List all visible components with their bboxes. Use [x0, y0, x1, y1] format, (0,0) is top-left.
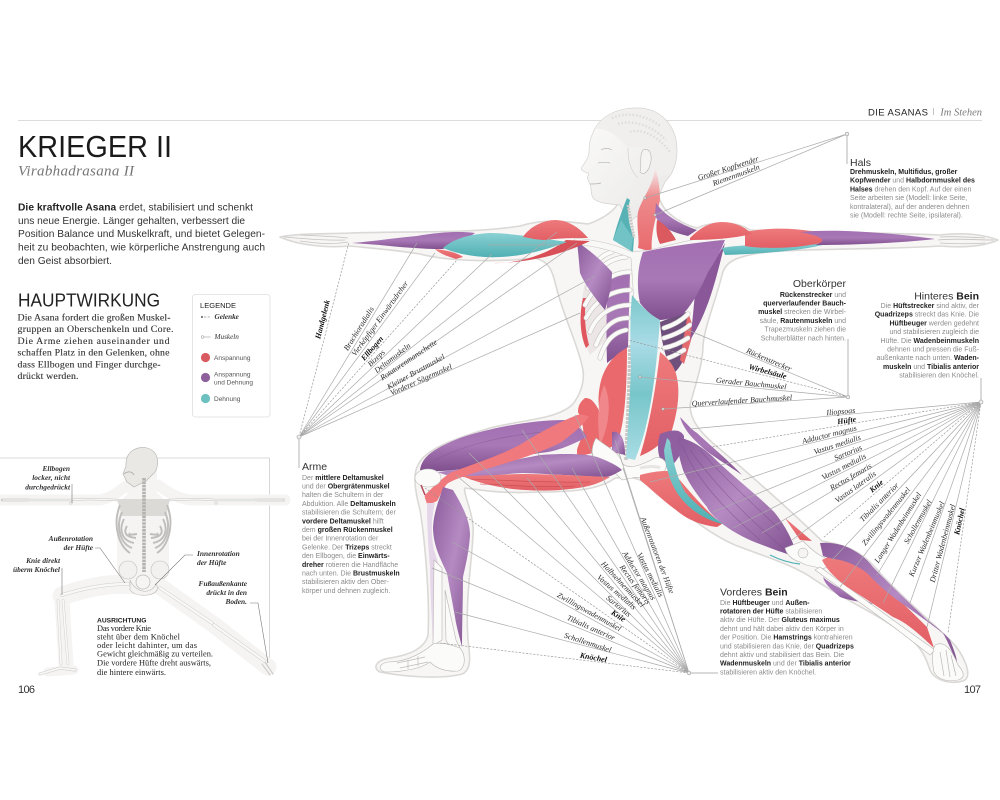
- text: Hauptwirkung: gruppen an Oberschenkeln und Core.: [18, 324, 174, 335]
- inset note: knee: überm Knöchel: [13, 565, 61, 574]
- figure: pelvis and hip bones: [592, 438, 666, 480]
- inset note: external rotation: [48, 534, 94, 552]
- text block: Vorderes Bein: dehnt und hält dabei aktiv den Körper in: [720, 626, 844, 633]
- text block: Oberkörper: [758, 278, 847, 342]
- text: Hauptwirkung: Die Asana fordert die großen Muskel-: [18, 312, 170, 324]
- label: Vorderer Sägemuskel: Vorderer Sägemuskel: [389, 362, 454, 397]
- label: Dritter Wadenbeinmuskel: Dritter Wadenbeinmuskel: [928, 502, 958, 584]
- text block: Hinteres Bein: und stabilisieren zugleich die: [890, 329, 979, 336]
- text: Hauptwirkung: drückt werden.: [18, 371, 78, 382]
- text: Hauptwirkung: [18, 312, 174, 382]
- text block: Vorderes Bein: der Position. Die Hamstrings kontrahieren: [720, 635, 853, 642]
- leaders: upper body: [628, 330, 850, 410]
- inset: skull: [123, 447, 158, 487]
- label: Sartorius: Sartorius: [604, 593, 633, 619]
- label: Schollenmuskel: Schollenmuskel: [563, 631, 613, 655]
- text block: Arme: dem großen Rückenmuskel: [302, 527, 393, 534]
- text block: Hals: Kopfwender und Halbdornmuskel des: [850, 178, 975, 185]
- inset note: external rotation: der Hüfte: [64, 543, 94, 552]
- text block: Hinteres Bein: [875, 290, 980, 380]
- figure: front knee: [415, 469, 441, 495]
- text block: Arme: den Ellbogen, die Einwärts-: [302, 553, 390, 560]
- label: Rückenstrecker: Rückenstrecker: [744, 346, 794, 374]
- label: Vastus medialis lower: Vastus medialis: [820, 452, 868, 482]
- text block: Hinteres Bein: Hüftbeuger werden gedehnt: [890, 320, 979, 327]
- text: Hauptwirkung: Die Arme ziehen auseinander und: [18, 336, 170, 347]
- alignment text: Die vordere Hüfte dreht auswärts,: [97, 658, 211, 668]
- text block: Vorderes Bein: Die Hüftbeuger und Außen-: [720, 600, 810, 607]
- page numbers: [18, 684, 981, 696]
- figure: left hand: [284, 235, 348, 244]
- figure: ribcage: [585, 252, 690, 460]
- main anatomical figure: [280, 108, 998, 682]
- figure: abdominal muscles: [577, 295, 678, 460]
- label: Adductor magnus: Adductor magnus: [620, 549, 658, 602]
- text block: Vorderes Bein: [720, 586, 854, 676]
- inset note: elbow: durchgedrückt: [25, 482, 71, 492]
- text block: Oberkörper: Trapezmuskeln ziehen die: [765, 327, 846, 334]
- text block: Hinteres Bein: Hinteres Bein: [914, 290, 979, 302]
- text block: Hinteres Bein: Quadrizeps streckt das Knie. Die: [875, 312, 979, 319]
- intro text: Position Balance und Muskelkraft, und bietet Gelegen-: [18, 229, 265, 240]
- inset note: outer foot edge: Boden.: [224, 597, 247, 606]
- label: Vastus medialis upper: Vastus medialis: [635, 551, 665, 599]
- alignment text: die hintere einwärts.: [97, 668, 166, 677]
- text: Hauptwirkung: dass Ellbogen und Finger durchge-: [18, 360, 160, 370]
- inset: leader lines: [62, 484, 268, 663]
- text block: Hals: kontralateral), auf der anderen dehnen: [850, 204, 970, 211]
- figure: right hand: [938, 237, 994, 244]
- inset: skeleton alignment figure: [0, 447, 285, 677]
- text block: Vorderes Bein: stabilisieren aktiv den Knöchel.: [720, 669, 816, 676]
- legend: tension and stretch: Anspannung: [214, 372, 251, 378]
- figure: deep hip muscles: [612, 430, 684, 468]
- figure: clavicle and sternum: [574, 236, 722, 302]
- inset note: elbow: locker, nicht: [32, 473, 71, 482]
- label: Sartorius: Sartorius: [833, 443, 863, 463]
- figure: back leg muscles: [640, 417, 812, 557]
- inset note: internal rotation: [196, 549, 240, 567]
- text block: Hinteres Bein: stabilisieren den Knöchel.: [899, 373, 979, 380]
- title: KRIEGER II: [18, 129, 172, 164]
- label: Kurzer Wadenbeinmuskel: Kurzer Wadenbeinmuskel: [906, 499, 947, 579]
- inset note: internal rotation: der Hüfte: [197, 558, 227, 567]
- inset: body halo: [0, 470, 285, 672]
- figure: head: [581, 108, 677, 222]
- text block: Hals: Hals: [850, 157, 871, 169]
- label: Bizeps: Bizeps: [366, 348, 387, 369]
- label: Adductor magnus: Adductor magnus: [800, 423, 858, 446]
- legend: tension: Anspannung: [214, 355, 251, 362]
- figure: right arm muscles: [690, 222, 935, 255]
- label: Querverlaufender Bauchmuskel: Querverlaufender Bauchmuskel: [691, 393, 793, 408]
- inset note: elbow: Ellbogen: [41, 464, 70, 473]
- text block: Oberkörper: querverlaufender Bauch-: [763, 300, 847, 308]
- text block: Oberkörper: Schulterblätter nach hinten.: [761, 335, 846, 342]
- label: Rectus femoris: Rectus femoris: [617, 562, 652, 606]
- label: Vastus medialis: Vastus medialis: [813, 433, 862, 456]
- text block: Arme: Abduktion. Alle Deltamuskeln: [302, 501, 396, 508]
- label: Handgelenk: Handgelenk: [313, 299, 332, 341]
- page numbers: 107: [964, 684, 981, 696]
- label: Zwillingswadenmuskel: Zwillingswadenmuskel: [556, 590, 624, 634]
- figure: front foot: [380, 643, 464, 672]
- label: Rotatorenmanschette: Rotatorenmanschette: [378, 337, 439, 383]
- label: Halbsehnenmuskel: Halbsehnenmuskel: [599, 559, 647, 610]
- text block: Arme: vordere Deltamuskel hilft: [302, 518, 384, 525]
- title: Virabhadrasana II: [18, 164, 135, 180]
- inset note: knee: Knie direkt: [25, 556, 61, 565]
- label: Gerader Bauchmuskel: Gerader Bauchmuskel: [716, 376, 788, 391]
- text block: Hinteres Bein: muskeln und Tibialis anterior: [883, 364, 979, 371]
- label: Vierköpfiger Einwärtsdreher: Vierköpfiger Einwärtsdreher: [350, 279, 411, 358]
- text block: Oberkörper: säule, Rautenmuskeln und: [760, 318, 846, 325]
- figure: chest muscles: [577, 240, 725, 340]
- text block: Hals: sie (Modell: rechte Seite, ipsilateral).: [850, 212, 963, 220]
- text block: Hinteres Bein: Die Hüftstrecker sind aktiv, der: [881, 303, 980, 310]
- text block: Arme: bei der Innenrotation der: [302, 536, 379, 543]
- label: Langer Wadenbeinmuskel: Langer Wadenbeinmuskel: [872, 490, 924, 565]
- label: Außenrotatoren der Hüfte: Außenrotatoren der Hüfte: [638, 515, 676, 595]
- label: Rectus femoris: Rectus femoris: [827, 461, 873, 493]
- alignment text: AUSRICHTUNG: [97, 618, 146, 624]
- text block: Hals: Seite arbeiten sie (Modell: linke Seite,: [850, 195, 967, 202]
- leaders: arms: [297, 232, 595, 468]
- label: Kleiner Brustmuskel: Kleiner Brustmuskel: [384, 352, 447, 392]
- inset note: outer foot edge: drückt in den: [206, 588, 247, 597]
- text: Hauptwirkung: schaffen Platz in den Gelenken, ohne: [18, 348, 170, 358]
- text block: Arme: stabilisieren aktiv den Ober-: [302, 579, 389, 586]
- inset note: external rotation: Außenrotation: [48, 534, 93, 543]
- label: Iliopsoas: Iliopsoas: [825, 406, 856, 417]
- figure: rib background: [581, 272, 694, 372]
- text block: Arme: [302, 461, 400, 595]
- intro text: Die kraftvolle Asana erdet, stabilisiert und schenkt: [18, 202, 253, 214]
- label: Schollenmuskel: Schollenmuskel: [902, 497, 934, 545]
- label: Brachioradialis: Brachioradialis: [342, 305, 376, 352]
- figure: body silhouette: [280, 200, 998, 682]
- text block: Vorderes Bein: aktiv die Hüfte. Der Gluteus maximus: [720, 617, 840, 624]
- intro text: [18, 202, 265, 267]
- text block: Arme: dreher rotieren die Handfläche: [302, 562, 398, 569]
- legend: tension and stretch: [201, 372, 253, 386]
- label: Vastus medialis lower: Vastus medialis: [595, 573, 638, 612]
- alignment text: Das vordere Knie: [97, 624, 151, 633]
- heading: Hauptwirkung: HAUPTWIRKUNG: [18, 290, 160, 310]
- label: Wirbelsäule: Wirbelsäule: [748, 362, 788, 381]
- figure: back knee: [770, 541, 828, 568]
- text block: Hinteres Bein: außenkante nach unten. Waden-: [877, 355, 980, 362]
- inset note: elbow: [25, 464, 71, 492]
- legend: stretch: Dehnung: [214, 396, 241, 403]
- intro text: uns neue Energie. Länger gehalten, verbessert die: [18, 216, 245, 227]
- legend: tension and stretch: und Dehnung: [214, 380, 253, 386]
- legend: joints: Gelenke: [214, 313, 240, 321]
- inset: legs: [40, 584, 273, 675]
- inset note: internal rotation: Innenrotation: [196, 549, 240, 558]
- text block: Oberkörper: muskel strecken die Wirbel-: [758, 309, 847, 316]
- text block: Hals: [850, 157, 975, 220]
- intro text: heit zu beobachten, wie körperliche Anstrengung auch: [18, 242, 265, 254]
- text block: Vorderes Bein: rotatoren der Hüfte stabilisieren: [720, 608, 822, 616]
- label: Hüfte: Hüfte: [836, 415, 857, 426]
- text block: Oberkörper: Rückenstrecker und: [780, 292, 846, 299]
- figure: back lower leg muscles: [815, 543, 957, 663]
- inset note: knee: [13, 556, 61, 574]
- label: Knie: Knie: [609, 607, 628, 624]
- text block: Vorderes Bein: dehnt aktiv und stabilisiert das Bein. Die: [720, 652, 844, 659]
- text block: Vorderes Bein: Vorderes Bein: [720, 586, 788, 598]
- label: Tibialis anterior: Tibialis anterior: [858, 480, 901, 524]
- header rule: [18, 120, 982, 121]
- text block: Arme: körper und dehnen zugleich.: [302, 588, 390, 595]
- label: Zwillingswadenmuskel: Zwillingswadenmuskel: [860, 485, 913, 547]
- intro text: den Geist absorbiert.: [18, 256, 112, 267]
- legend: [192, 294, 270, 417]
- running header: DIE ASANAS: [868, 108, 928, 118]
- inset: arms: [2, 499, 285, 505]
- text block: Vorderes Bein: Wadenmuskeln und der Tibialis anterior: [720, 661, 851, 668]
- label: Knöchel: Knöchel: [578, 651, 608, 664]
- figure: lower front leg: [427, 487, 470, 652]
- title: [18, 129, 172, 180]
- text block: Arme: stabilisieren die Schultern; der: [302, 510, 396, 517]
- label: Knöchel: Knöchel: [952, 506, 967, 537]
- text block: Arme: Arme: [302, 461, 327, 473]
- label: Riemenmuskeln: Riemenmuskeln: [710, 162, 761, 188]
- text block: Oberkörper: Oberkörper: [793, 278, 846, 290]
- inset: ribcage: [117, 478, 170, 572]
- alignment text: [97, 618, 213, 677]
- running header: Im Stehen: [939, 108, 982, 118]
- alignment text: oder leicht dahinter, um das: [97, 641, 197, 650]
- leaders: neck: [644, 132, 849, 216]
- leaders: back leg: [650, 378, 983, 633]
- label: Deltamuskeln: Deltamuskeln: [372, 341, 412, 376]
- text block: Hals: Halses drehen den Kopf. Auf der einen: [850, 186, 972, 193]
- text block: Hinteres Bein: Hüfte. Die Wadenbeinmuskeln: [880, 338, 979, 345]
- text block: Arme: Gelenke. Der Trizeps streckt: [302, 544, 392, 551]
- inset: pelvis: [119, 561, 169, 595]
- label: Knie: Knie: [867, 477, 886, 495]
- text block: Hals: Drehmuskeln, Multifidus, großer: [850, 169, 958, 176]
- text block: Arme: halten die Schultern in der: [302, 492, 384, 499]
- inset note: outer foot edge: Fußaußenkante: [199, 579, 248, 588]
- figure: neck muscles: [613, 167, 697, 252]
- label: Ellbogen: Ellbogen: [358, 334, 385, 363]
- legend: muscles: Muskeln: [214, 333, 239, 341]
- legend: LEGENDE: [200, 301, 236, 310]
- text block: Hinteres Bein: dehnen und pressen die Fuß-: [887, 346, 980, 354]
- running header: [868, 108, 982, 118]
- figure: front thigh muscles: [420, 415, 622, 504]
- label: Vastus lateralis: Vastus lateralis: [833, 469, 878, 505]
- text block: Arme: und der Obergrätenmuskel: [302, 484, 390, 490]
- page numbers: 106: [18, 684, 35, 696]
- leaders: front leg: [425, 415, 718, 675]
- text block: Vorderes Bein: und stabilisieren das Knie, der Quadrizeps: [720, 643, 854, 650]
- alignment text: steht über dem Knöchel: [97, 632, 181, 642]
- inset note: outer foot edge: [199, 579, 248, 606]
- text block: Arme: Der mittlere Deltamuskel: [302, 475, 384, 482]
- alignment text: Gewicht gleichmäßig zu verteilen.: [97, 650, 213, 658]
- text block: Arme: nach unten. Die Brustmuskeln: [302, 570, 400, 578]
- label: Großer Kopfwender: Großer Kopfwender: [697, 154, 761, 182]
- figure: left arm muscles: [352, 220, 590, 263]
- figure: back foot: [933, 644, 963, 681]
- label: Tibialis anterior: Tibialis anterior: [566, 613, 617, 643]
